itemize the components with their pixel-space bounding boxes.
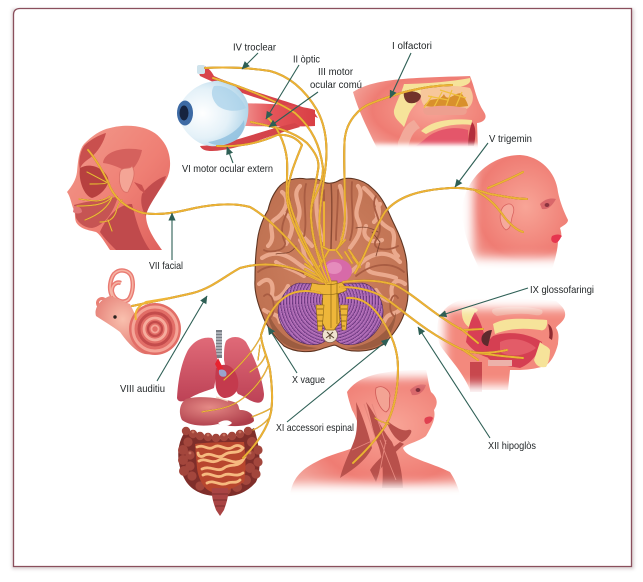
nerve: IV troclear: [205, 68, 331, 283]
label: III motor ocular comu: ocular comú: [310, 79, 362, 91]
nerve: III oculomotor branch: [267, 117, 326, 284]
illustration: thoracic and abdominal organs: [177, 330, 264, 516]
lower jaw bone: [534, 342, 550, 367]
arrow: VII facial: [171, 213, 173, 260]
label: X vague: X vague: [292, 374, 325, 386]
facial nerve branches: [77, 172, 122, 231]
palate: [423, 106, 467, 115]
arrow: V trigemin: [455, 143, 488, 187]
head: [67, 126, 170, 250]
lips: [551, 234, 562, 243]
illustration: inner ear and cochlea: [96, 271, 181, 355]
trochlea: [197, 65, 205, 74]
nerve: VIII auditiu: [132, 265, 323, 306]
nerve: VI abducens: [217, 135, 326, 282]
arrow: XI accessori espinal: [287, 339, 389, 422]
arrow: III motor ocular comu: [269, 92, 318, 127]
nerve: XII hipoglos: [340, 287, 523, 358]
nerve: IX glossofaringi: [343, 281, 483, 330]
palate and gums: [492, 307, 543, 316]
nerve: X vague: [243, 291, 320, 458]
nerve: XI accessori espinal: [347, 298, 398, 463]
neck muscles: [340, 402, 411, 488]
nerve: V trigemin lower branch: [476, 191, 523, 232]
cochlear nerve thickening: [135, 298, 170, 320]
upper cream bone: [493, 319, 547, 334]
illustration: eye with muscles: [177, 65, 318, 151]
gyri: [259, 186, 405, 322]
lungs: [177, 338, 217, 401]
medulla cross-section: [322, 328, 338, 342]
label: III motor ocular comu: III motor: [318, 66, 353, 78]
arrow: VIII auditiu: [157, 296, 207, 381]
label: VI motor ocular extern: VI motor ocular extern: [182, 163, 273, 175]
illustration: brain, inferior view: [255, 178, 408, 352]
label: XII hipoglos: XII hipoglòs: [488, 440, 536, 452]
cerebellum: [278, 283, 328, 345]
vagus branches: [202, 333, 271, 430]
arrow: IX glossofaringi: [439, 288, 528, 316]
trachea: [216, 330, 222, 358]
nerve: V trigemin upper branch: [488, 172, 523, 188]
nerve: III oculomotor: [251, 122, 328, 282]
cochlea: [129, 303, 181, 355]
label: VII facial: VII facial: [149, 260, 183, 272]
label: IX glossofaringi: IX glossofaringi: [530, 284, 594, 296]
eye: [410, 385, 426, 395]
sinus bone: [394, 78, 470, 127]
label: I olfactori: I olfactori: [392, 40, 432, 52]
rectum: [212, 488, 228, 516]
eyeball: [178, 81, 248, 146]
central fissure: [330, 183, 333, 250]
lips: [424, 416, 433, 424]
label: II optic: II òptic: [293, 54, 320, 66]
illustration: mouth and throat section: [437, 299, 565, 392]
arrow: IV troclear: [242, 53, 258, 69]
small intestine: [195, 442, 246, 492]
lower temporal lobes: [268, 312, 318, 350]
arrow: II optic: [266, 65, 299, 119]
nerve: V trigemin: [355, 188, 527, 273]
nerve: IX lower branch: [460, 328, 478, 343]
XI neck branch: [375, 418, 389, 424]
illustration: trigeminal head: [462, 155, 568, 270]
ear: [119, 166, 134, 192]
tongue: [486, 333, 542, 368]
label: VIII auditiu: VIII auditiu: [120, 383, 165, 395]
nerve: VII facial: [88, 150, 323, 281]
arrow: X vague: [268, 327, 297, 373]
illustration: neck and shoulders: [290, 370, 460, 495]
cerebrum outline: [255, 178, 408, 352]
nerve: XII branches: [470, 350, 507, 353]
illustration: olfactory head section: [353, 76, 486, 150]
nerve: II optic: [213, 78, 323, 262]
nerve root stubs: [305, 202, 360, 282]
illustration: facial head with muscles: [67, 126, 170, 250]
cheek muscles: [79, 133, 106, 170]
hypothalamus and pons: [322, 259, 352, 283]
label: IV troclear: IV troclear: [233, 42, 276, 54]
arrow: XII hipoglos: [418, 327, 490, 438]
nerve: I olfactori: [336, 85, 452, 250]
optic chiasm and tracts: [316, 240, 345, 272]
ear: [500, 204, 514, 230]
brain stem: [310, 281, 348, 331]
ear: [376, 387, 390, 412]
heart: [215, 365, 238, 398]
label: V trigemin: V trigemin: [489, 133, 532, 145]
vestibule: [96, 296, 150, 354]
nerve: XII lower branch: [462, 349, 478, 360]
arrow: I olfactori: [390, 53, 411, 98]
large intestine: [178, 427, 263, 496]
label: XI accessori espinal: XI accessori espinal: [276, 422, 354, 434]
eye muscles: [197, 66, 318, 151]
stomach: [180, 397, 254, 426]
semicircular canals: [110, 271, 133, 302]
eye: [540, 199, 556, 209]
arrow: VI motor ocular extern: [227, 147, 233, 163]
iris: [177, 100, 193, 126]
throat: [470, 362, 482, 392]
